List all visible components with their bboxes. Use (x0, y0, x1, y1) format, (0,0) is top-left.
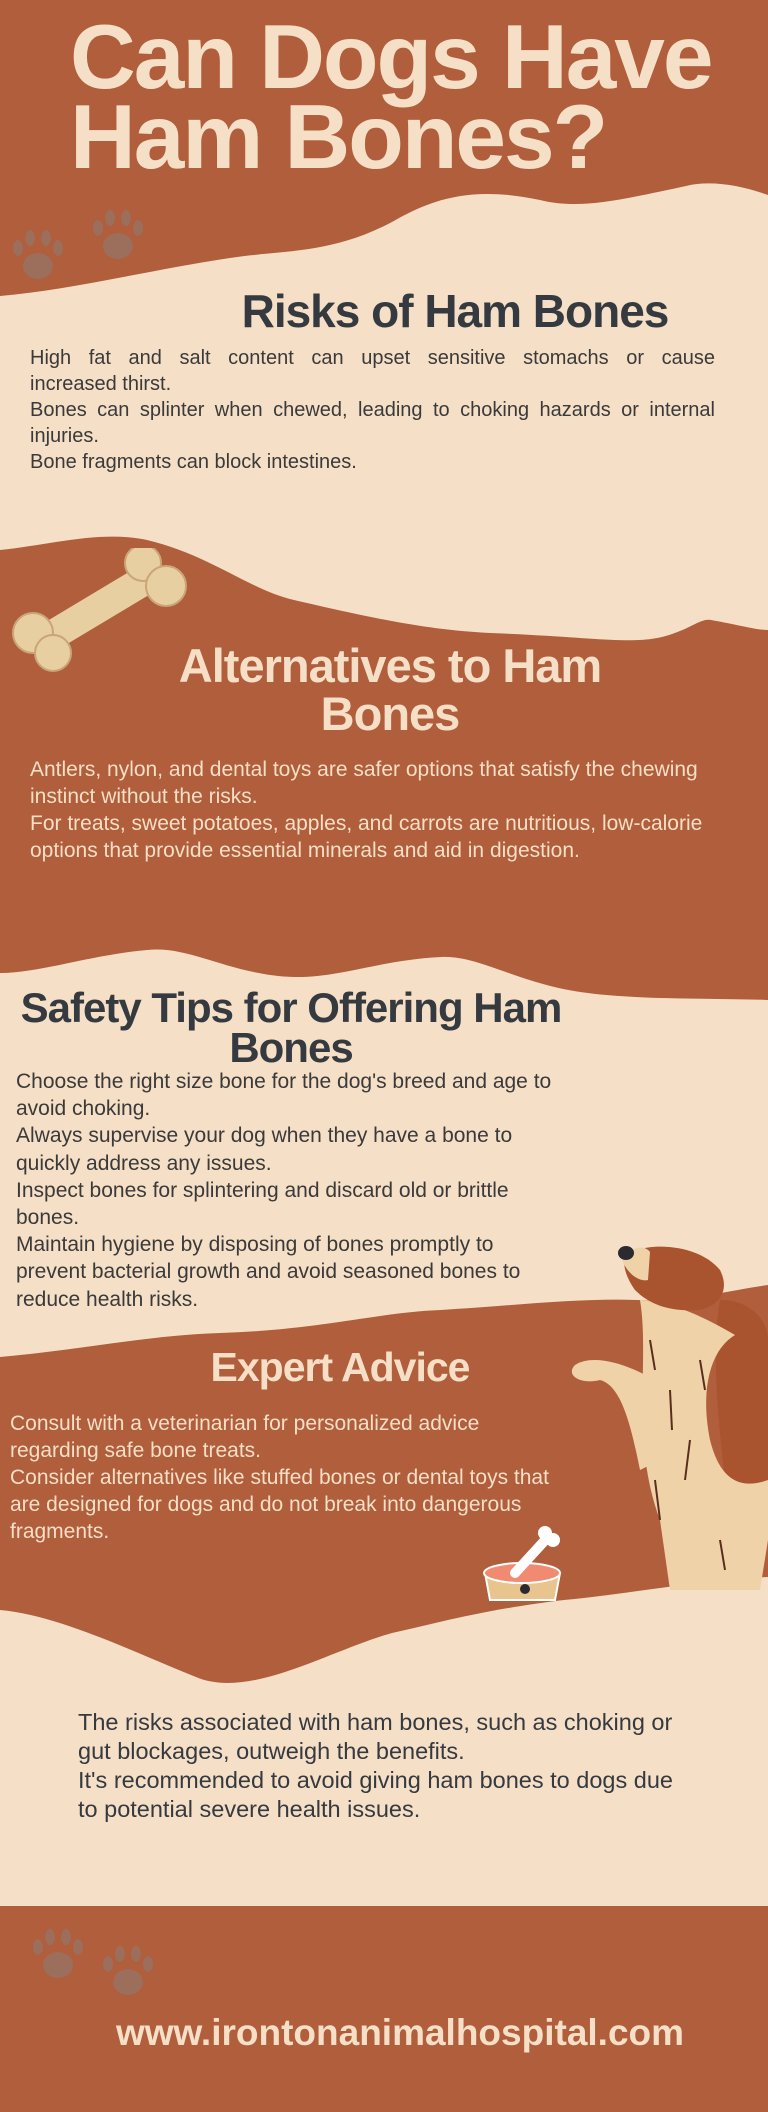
icon: bone (12, 548, 187, 672)
text: expert advice: are designed for dogs and do not break into dangerous (10, 1493, 521, 1516)
heading: alternatives (179, 639, 601, 740)
text: safety tips: Always supervise your dog when they have a bone to (16, 1124, 512, 1147)
text: risks: Bone fragments can block intestines. (30, 451, 357, 473)
icon: paw prints footer (33, 1929, 153, 1995)
text: safety tips: prevent bacterial growth and avoid seasoned bones to (16, 1260, 520, 1283)
text: safety tips: quickly address any issues. (16, 1152, 272, 1175)
heading: expert advice: Expert Advice (211, 1344, 469, 1390)
title: Can Dogs Have (70, 7, 712, 108)
text: safety tips: Inspect bones for splintering and discard old or brittle (16, 1179, 509, 1202)
heading: safety tips: Safety Tips for Offering Ham (21, 984, 561, 1031)
heading: safety tips (21, 984, 561, 1071)
heading: safety tips: Bones (229, 1024, 353, 1071)
text: safety tips: Maintain hygiene by disposing of bones promptly to (16, 1233, 493, 1256)
text: expert advice: regarding safe bone treats. (10, 1439, 261, 1462)
text: risks: High fat and salt content can upset sensitive stomachs or cause (30, 347, 715, 369)
text: risks: increased thirst. (30, 373, 171, 395)
footer url: www.irontonanimalhospital.com (116, 2012, 684, 2053)
title: Ham Bones? (70, 87, 606, 188)
text: alternatives: For treats, sweet potatoes, apples, and carrots are nutritious, low-calorie (30, 812, 702, 835)
heading: alternatives: Alternatives to Ham (179, 639, 601, 692)
text: alternatives: options that provide essential minerals and aid in digestion. (30, 839, 580, 862)
text: expert advice: Consider alternatives like stuffed bones or dental toys that (10, 1466, 549, 1489)
text: expert advice (10, 1412, 549, 1543)
text: risks: injuries. (30, 425, 99, 447)
title (70, 7, 712, 188)
text: conclusion: to potential severe health issues. (78, 1796, 420, 1822)
text: safety tips: bones. (16, 1206, 79, 1229)
text: safety tips: Choose the right size bone for the dog's breed and age to (16, 1070, 551, 1093)
text: safety tips: reduce health risks. (16, 1288, 198, 1311)
text: alternatives: instinct without the risks. (30, 785, 258, 808)
text: risks (30, 347, 715, 473)
heading: alternatives: Bones (321, 687, 459, 740)
text: conclusion (78, 1709, 673, 1822)
text: risks: Bones can splinter when chewed, leading to choking hazards or internal (30, 399, 715, 421)
text: safety tips: avoid choking. (16, 1097, 150, 1120)
text: expert advice: fragments. (10, 1520, 109, 1543)
icon: paw prints top (13, 210, 143, 279)
text: conclusion: gut blockages, outweigh the benefits. (78, 1738, 465, 1764)
text: conclusion: The risks associated with ham bones, such as choking or (78, 1709, 672, 1735)
icon: dog (572, 1246, 768, 1590)
text: safety tips (16, 1070, 551, 1311)
heading: risks: Risks of Ham Bones (242, 285, 668, 337)
text: conclusion: It's recommended to avoid giving ham bones to dogs due (78, 1767, 673, 1793)
text: alternatives: Antlers, nylon, and dental toys are safer options that satisfy the chewing (30, 758, 698, 781)
text: expert advice: Consult with a veterinarian for personalized advice (10, 1412, 479, 1435)
icon: bowl with bone (483, 1526, 562, 1601)
text: alternatives (30, 758, 702, 862)
